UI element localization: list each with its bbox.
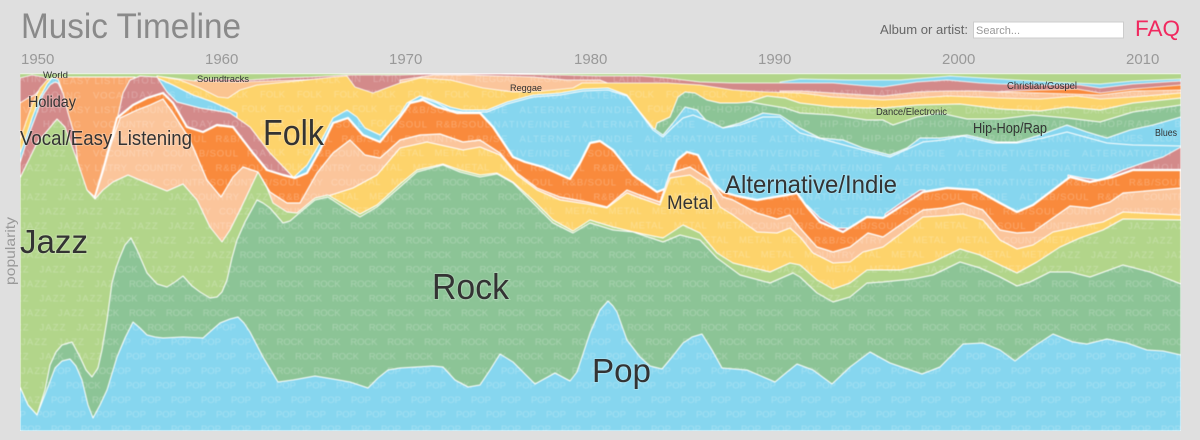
- label: Christian/Gospel: Christian/Gospel: [1007, 81, 1077, 92]
- year axis: 1960: [205, 51, 238, 68]
- label: Vocal/Easy Listening: Vocal/Easy Listening: [20, 127, 192, 150]
- search label: Album or artist:: [880, 22, 968, 37]
- label: Alternative/Indie: Alternative/Indie: [725, 171, 897, 199]
- band: rock: [20, 165, 1181, 431]
- label: Holiday: Holiday: [28, 94, 76, 111]
- search control: [880, 22, 1124, 38]
- band: vocal and easy listening: [20, 76, 311, 196]
- year axis: 2000: [942, 51, 975, 68]
- band: latin: [20, 73, 1181, 103]
- band: alternative and indie: [418, 88, 1181, 227]
- band: pop: [20, 301, 1181, 431]
- y axis label: popularity: [2, 217, 18, 285]
- label: Hip-Hop/Rap: Hip-Hop/Rap: [973, 120, 1047, 137]
- band: hip-hop and rap: [654, 90, 1181, 154]
- band: world top strip: [20, 73, 1181, 84]
- band: reggae: [399, 74, 1181, 100]
- band: R&B and soul: [94, 91, 1181, 252]
- title: Music Timeline: [21, 7, 241, 46]
- label: Metal: Metal: [667, 193, 713, 214]
- label: Pop: Pop: [592, 352, 651, 389]
- search input: Search...: [976, 25, 1020, 37]
- band: jazz: [20, 119, 1181, 431]
- band: thin blue top right: [779, 75, 1181, 88]
- label: Blues: Blues: [1155, 128, 1177, 139]
- band: country: [95, 98, 1181, 263]
- label: Dance/Electronic: Dance/Electronic: [876, 107, 947, 118]
- year axis: 2010: [1126, 51, 1159, 68]
- label: Reggae: Reggae: [510, 83, 542, 94]
- label: World: World: [43, 70, 68, 81]
- label: Folk: Folk: [263, 112, 325, 153]
- band: holiday: [20, 74, 1181, 232]
- label: Jazz: Jazz: [20, 223, 88, 260]
- label: Soundtracks: Soundtracks: [197, 74, 249, 85]
- streamgraph chart: [20, 73, 1181, 431]
- FAQ link: FAQ: [1135, 16, 1180, 41]
- year axis: 1990: [758, 51, 791, 68]
- year axis: 1970: [389, 51, 422, 68]
- search input: [974, 22, 1124, 38]
- band: thin orange right: [996, 84, 1181, 96]
- band: blues: [20, 78, 1181, 178]
- label: Rock: Rock: [432, 266, 510, 307]
- genre labels: [20, 70, 1177, 389]
- year axis: 1950: [21, 51, 54, 68]
- band: dance and electronic: [747, 94, 1181, 125]
- band: folk: [20, 75, 1181, 176]
- band: metal: [329, 141, 1181, 289]
- year axis: 1980: [574, 51, 607, 68]
- year axis: [21, 51, 1159, 68]
